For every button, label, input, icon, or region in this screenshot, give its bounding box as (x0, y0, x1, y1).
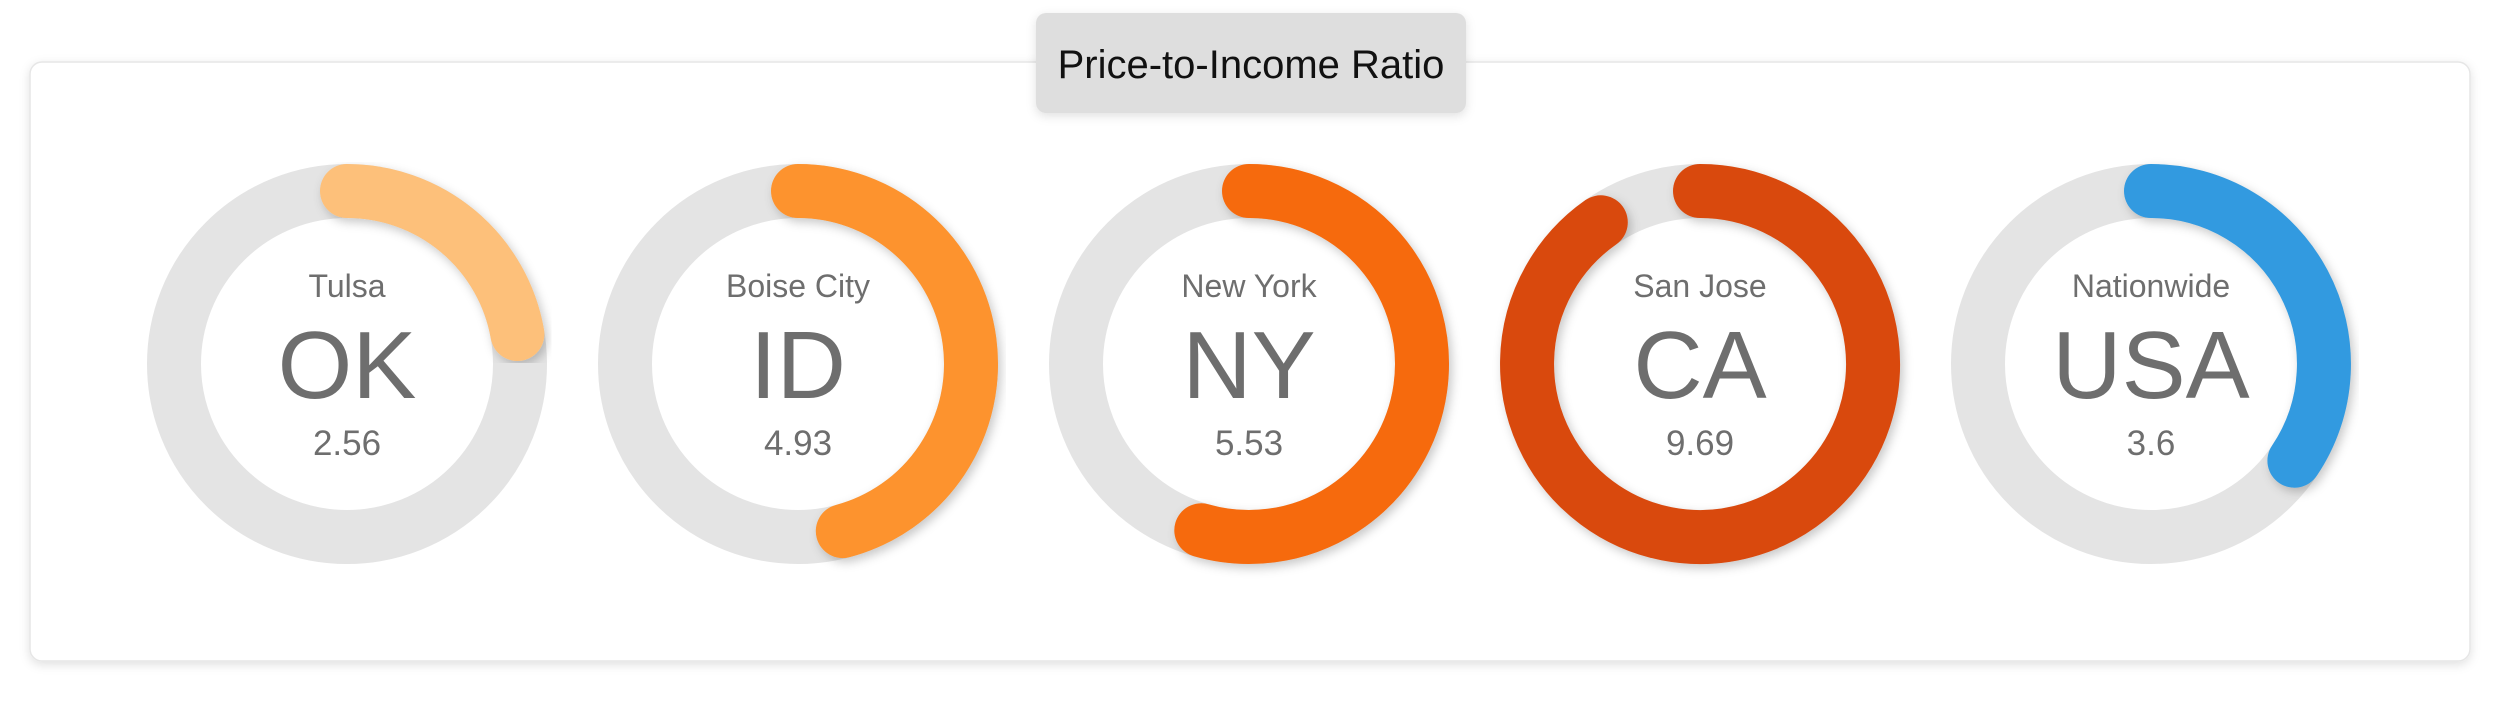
gauge: Nationwide USA (1978, 191, 2324, 537)
gauge: Nationwide USA: 3.6 (2127, 424, 2175, 463)
gauge: San Jose CA (1527, 191, 1873, 537)
gauge: New York NY: NY (1182, 312, 1316, 419)
gauge: New York NY: 5.53 (1215, 424, 1283, 463)
gauge: Boise City ID: ID (750, 312, 846, 419)
gauge: Tulsa OK: OK (278, 312, 416, 419)
gauge: Tulsa OK (174, 191, 520, 537)
title (1036, 13, 1466, 113)
gauge: Tulsa OK: Tulsa (308, 268, 386, 304)
title: Price-to-Income Ratio (1058, 43, 1444, 87)
gauge: Nationwide USA: Nationwide (2072, 268, 2230, 304)
gauge: Boise City ID: 4.93 (764, 424, 832, 463)
gauge: New York NY (1076, 191, 1422, 537)
gauge: San Jose CA: CA (1633, 312, 1767, 419)
gauge: San Jose CA: 9.69 (1666, 424, 1734, 463)
gauge: Boise City ID (625, 191, 971, 537)
gauge: San Jose CA: San Jose (1633, 268, 1767, 304)
gauge: Tulsa OK: 2.56 (313, 424, 381, 463)
gauge: Nationwide USA: USA (2052, 312, 2250, 419)
gauge: Boise City ID: Boise City (726, 268, 870, 304)
gauge: New York NY: New York (1181, 268, 1318, 304)
